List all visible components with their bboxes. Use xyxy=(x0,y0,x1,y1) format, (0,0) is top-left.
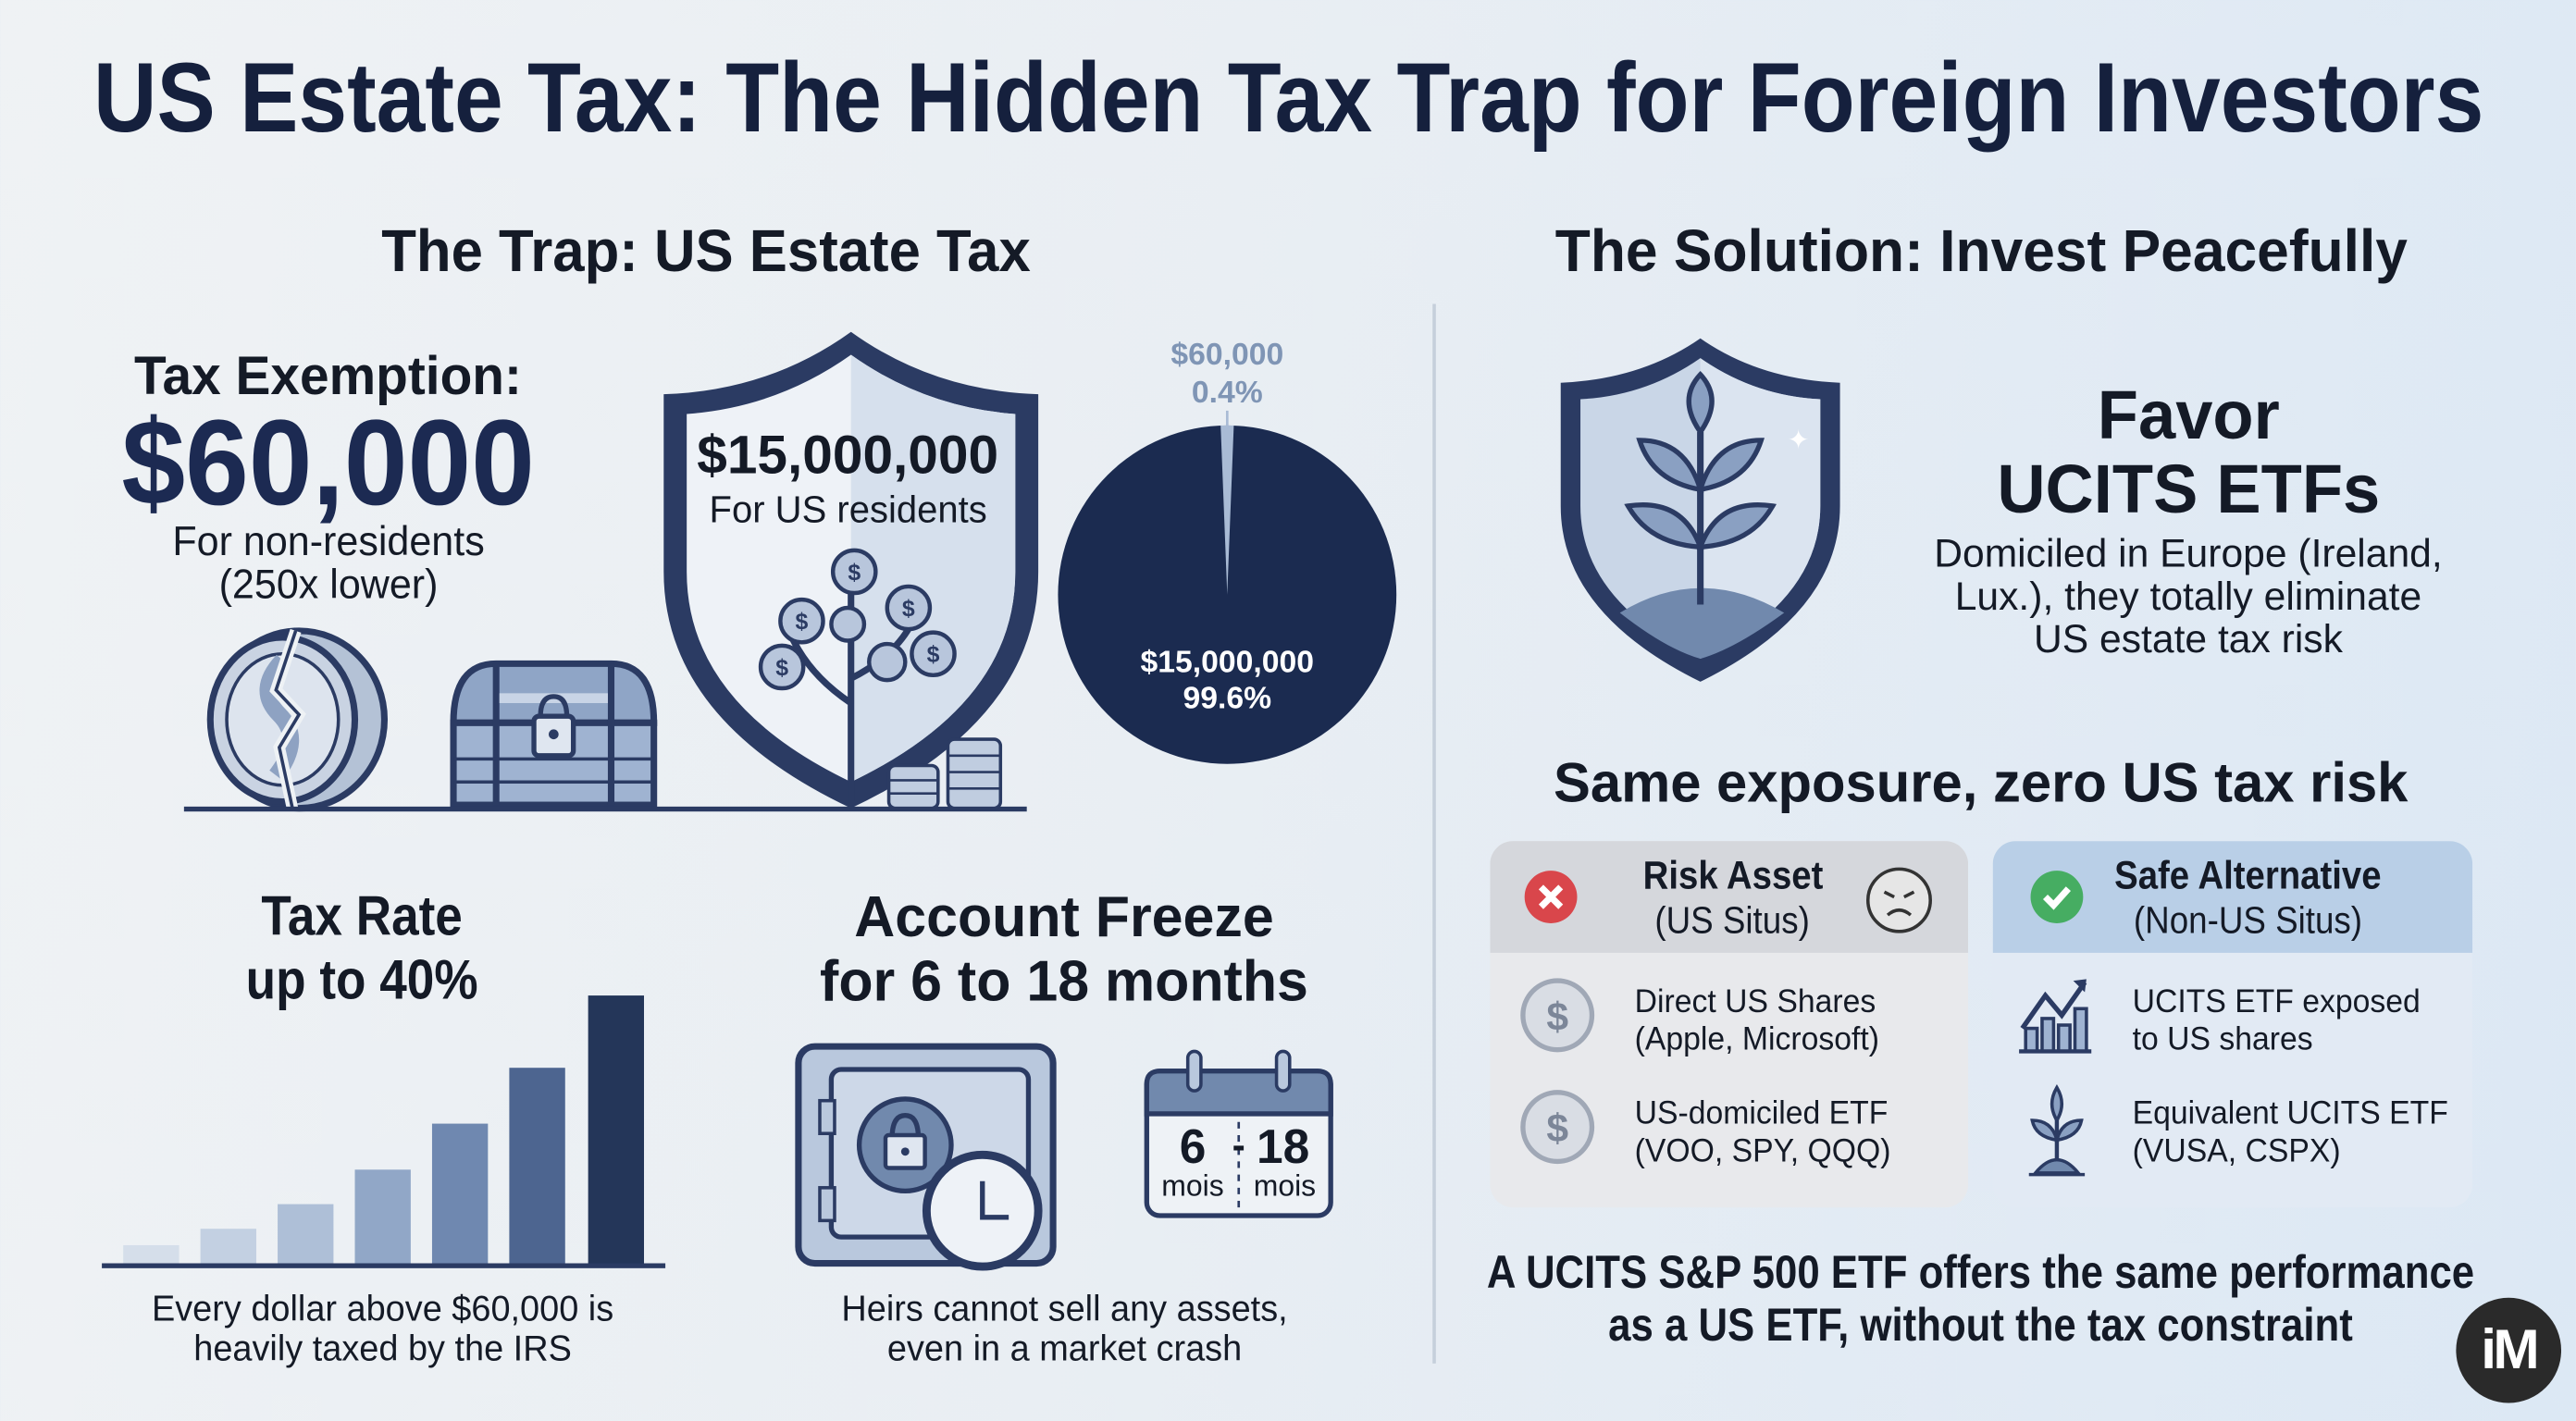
risk item 2: $ xyxy=(1546,1106,1568,1151)
icon: calendar 6-18 mois: 6 xyxy=(1180,1119,1206,1173)
icon: treasure chest xyxy=(450,661,657,807)
bar chart xyxy=(102,333,2530,1401)
pie chart xyxy=(1058,337,1397,764)
tax rate caption: Every dollar above $60,000 is xyxy=(152,1288,613,1329)
text block: favor UCITS: UCITS ETFs xyxy=(1997,451,2380,527)
logo: iM xyxy=(2456,1298,2561,1402)
icon: red x xyxy=(1525,871,1577,923)
safe item 2 xyxy=(2028,1084,2086,1177)
bottom conclusion xyxy=(1488,1247,2475,1351)
icon: shield with money tree: $ xyxy=(848,561,861,586)
risk title: (US Situs) xyxy=(1655,898,1810,941)
icon: calendar 6-18 mois: mois xyxy=(1254,1169,1316,1203)
safe item 1 xyxy=(2019,979,2091,1054)
icon: shield with money tree: $ xyxy=(775,656,788,681)
freeze heading xyxy=(821,885,1308,1014)
icon: shield with money tree: $ xyxy=(927,643,940,668)
safe title: Safe Alternative xyxy=(2114,854,2381,898)
tax rate heading: Tax Rate xyxy=(261,885,462,948)
card: risk asset xyxy=(1490,841,1968,1207)
text block: favor UCITS: Lux.), they totally eliminate xyxy=(1955,575,2421,619)
icon: calendar 6-18 mois: - xyxy=(1232,1123,1245,1168)
bottom conclusion: A UCITS S&P 500 ETF offers the same performance xyxy=(1488,1247,2475,1298)
icon: green check xyxy=(2030,871,2084,923)
exemption note xyxy=(172,519,485,608)
card: safe alternative: Equivalent UCITS ETF xyxy=(2133,1095,2448,1131)
icon: angry clock xyxy=(1866,868,1932,933)
icon: calendar 6-18 mois: 18 xyxy=(1257,1119,1309,1173)
panel: tax rate xyxy=(102,333,2530,1401)
icon: shield with plant xyxy=(1560,339,1840,682)
exemption label: Tax Exemption: xyxy=(135,345,523,406)
safe title xyxy=(2114,854,2381,941)
card: risk asset: Direct US Shares xyxy=(1635,984,1876,1020)
freeze caption xyxy=(841,1288,1288,1368)
ground line xyxy=(184,807,1027,811)
exemption note: (250x lower) xyxy=(219,562,439,608)
text block: favor UCITS: Favor xyxy=(2097,377,2279,453)
card: safe alternative: UCITS ETF exposed xyxy=(2133,984,2421,1020)
icon: coin stacks xyxy=(886,737,1003,807)
pie chart: 99.6% xyxy=(1183,680,1271,715)
freeze caption: Heirs cannot sell any assets, xyxy=(841,1288,1288,1329)
safe title: (Non-US Situs) xyxy=(2133,898,2361,941)
card: risk asset: (Apple, Microsoft) xyxy=(1635,1021,1879,1058)
logo: iM: iM xyxy=(2481,1319,2536,1381)
tax rate caption xyxy=(152,1288,613,1368)
icon: shield with money tree: $ xyxy=(902,597,915,622)
safe header xyxy=(1993,841,2472,953)
freeze heading: Account Freeze xyxy=(855,885,1274,949)
card: safe alternative: (VUSA, CSPX) xyxy=(2133,1133,2341,1169)
icon: shield with money tree xyxy=(663,331,1038,807)
shield text: For US residents xyxy=(709,488,986,531)
divider xyxy=(1432,304,1436,1364)
panel: account freeze xyxy=(795,885,1333,1368)
icon: calendar 6-18 mois xyxy=(1144,1049,1333,1218)
card: risk asset: (VOO, SPY, QQQ) xyxy=(1635,1133,1890,1169)
icon: broken coin xyxy=(207,627,388,812)
pie chart: $60,000 xyxy=(1170,337,1283,372)
freeze caption: even in a market crash xyxy=(887,1328,1242,1368)
heading: same exposure: Same exposure, zero US tax risk xyxy=(1554,752,2409,815)
text block: favor UCITS: Domiciled in Europe (Ireland, xyxy=(1934,532,2443,576)
card: safe alternative: to US shares xyxy=(2133,1021,2313,1058)
text block: favor UCITS: US estate tax risk xyxy=(2034,618,2343,662)
exemption amount: $60,000 xyxy=(122,394,535,531)
risk item 2 xyxy=(1520,1090,1595,1164)
title: US Estate Tax: The Hidden Tax Trap for Foreign Investors xyxy=(93,43,2483,153)
exemption note: For non-residents xyxy=(172,519,485,565)
risk item 1 xyxy=(1520,978,1595,1053)
shield text xyxy=(697,424,998,531)
heading: the trap: The Trap: US Estate Tax xyxy=(382,216,1031,284)
icon: calendar 6-18 mois: mois xyxy=(1161,1169,1224,1203)
card: risk asset: US-domiciled ETF xyxy=(1635,1095,1888,1131)
risk header xyxy=(1490,841,1968,953)
icon: safe with clock xyxy=(795,1044,1057,1271)
card: safe alternative xyxy=(1993,841,2472,1207)
pie chart: $15,000,000 xyxy=(1141,644,1314,679)
icon: shield with plant: ✦ xyxy=(1788,425,1810,455)
tax rate caption: heavily taxed by the IRS xyxy=(193,1328,572,1368)
tax rate heading xyxy=(245,885,477,1012)
shield text: $15,000,000 xyxy=(697,424,998,485)
pie chart: 0.4% xyxy=(1192,375,1263,410)
tax rate heading: up to 40% xyxy=(245,949,477,1012)
heading: the solution: The Solution: Invest Peacefully xyxy=(1555,216,2408,284)
risk item 1: $ xyxy=(1546,995,1568,1039)
freeze heading: for 6 to 18 months xyxy=(821,949,1308,1014)
icon: shield with money tree: $ xyxy=(796,610,809,635)
risk title xyxy=(1642,854,1823,941)
text block: favor UCITS xyxy=(1934,377,2443,662)
risk title: Risk Asset xyxy=(1642,854,1823,898)
panel: tax exemption xyxy=(122,345,535,608)
bottom conclusion: as a US ETF, without the tax constraint xyxy=(1609,1300,2354,1351)
